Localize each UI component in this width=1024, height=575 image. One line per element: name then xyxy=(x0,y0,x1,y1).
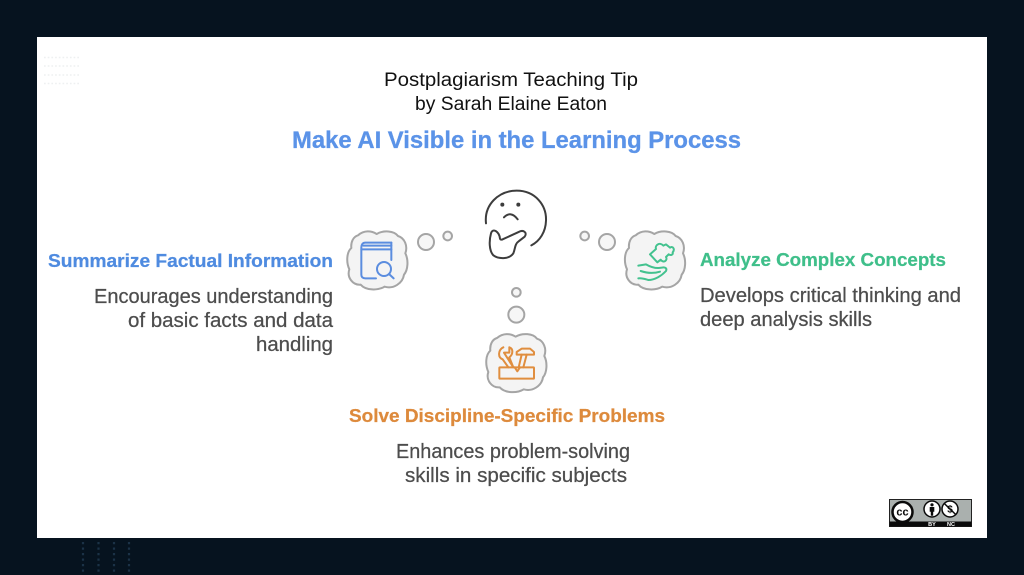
thought bubbles: bottom xyxy=(508,288,524,323)
icon: book with magnifier in cloud xyxy=(347,231,407,289)
left description: Encourages understanding xyxy=(94,286,333,308)
right description: deep analysis skills xyxy=(700,309,872,331)
left description: handling xyxy=(256,334,333,356)
icon: CC BY-NC licence badge xyxy=(890,500,972,528)
thinking diagram xyxy=(347,191,685,392)
icon: thinking face xyxy=(486,191,546,258)
left heading: Summarize Factual Information xyxy=(48,250,333,271)
bottom heading: Solve Discipline-Specific Problems xyxy=(349,405,665,426)
heading: Make AI Visible in the Learning Process xyxy=(292,127,741,154)
icon: CC BY-NC licence badge: cc xyxy=(896,506,909,518)
right item: analyze xyxy=(700,249,961,331)
left description xyxy=(94,286,334,356)
bottom item: solve xyxy=(349,405,665,487)
thought bubbles: right xyxy=(580,232,615,250)
right heading: Analyze Complex Concepts xyxy=(700,249,946,270)
right description: Develops critical thinking and xyxy=(700,285,961,307)
title: by Sarah Elaine Eaton xyxy=(415,94,607,115)
thought bubbles: left xyxy=(418,232,452,250)
icon: CC BY-NC licence badge: NC xyxy=(947,522,955,528)
icon: puzzle piece and hand in cloud xyxy=(625,231,685,289)
right description xyxy=(700,285,961,331)
icon: CC BY-NC licence badge: $ xyxy=(947,504,953,516)
bottom description: skills in specific subjects xyxy=(405,465,627,487)
icon: toolbox in cloud xyxy=(486,334,546,392)
left description: of basic facts and data xyxy=(128,310,334,332)
title xyxy=(384,70,638,115)
bottom description xyxy=(396,441,630,487)
icon: CC BY-NC licence badge: BY xyxy=(928,522,936,528)
bottom description: Enhances problem-solving xyxy=(396,441,630,463)
left item: summarize xyxy=(48,250,334,356)
title: Postplagiarism Teaching Tip xyxy=(384,70,638,91)
